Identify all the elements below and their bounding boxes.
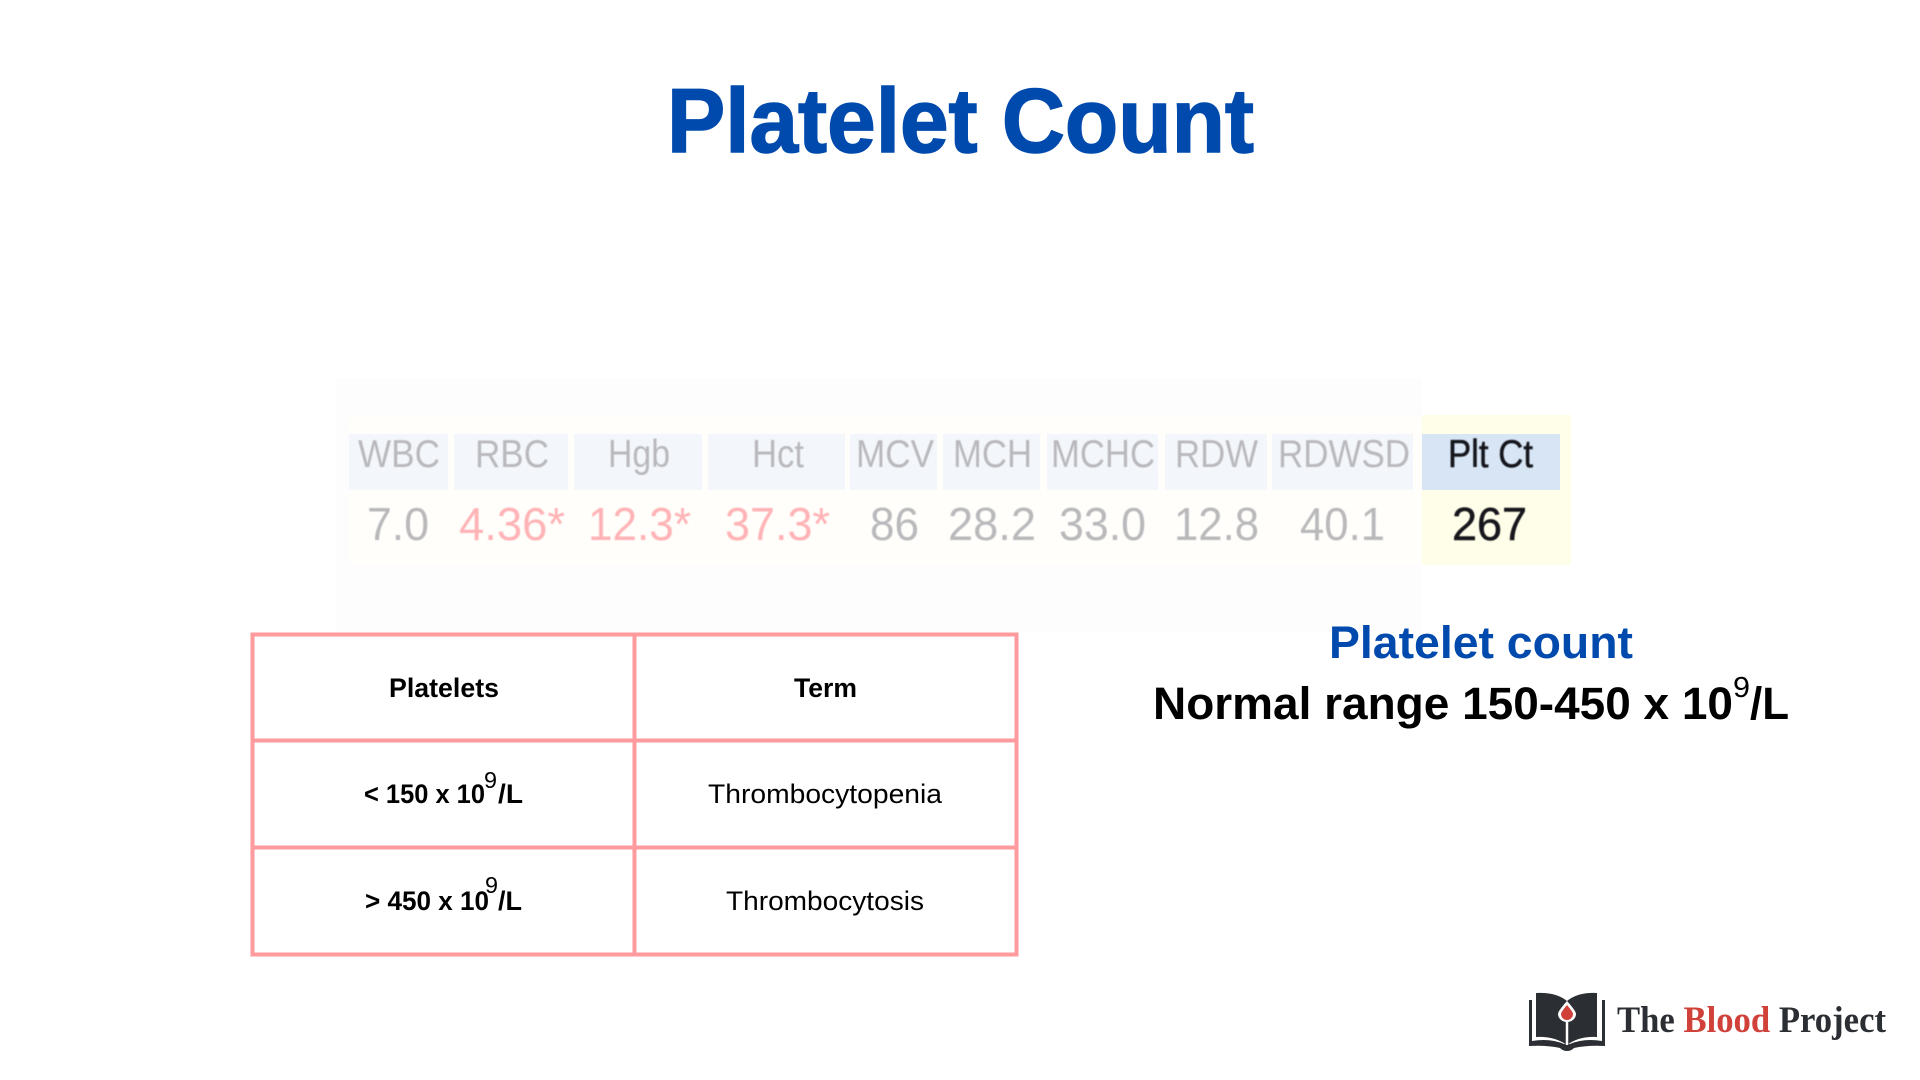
title: Platelet Count <box>667 71 1254 172</box>
row: below 150 <box>364 767 523 809</box>
lab value row: 12.8 <box>1174 498 1259 550</box>
lab header row: RBC <box>475 433 549 476</box>
lab value row: 28.2 <box>948 498 1036 550</box>
lab header row: RDW <box>1175 433 1258 476</box>
term: Thrombocytopenia: Thrombocytopenia <box>708 779 943 809</box>
text block: normal range: Normal range 150-450 x 10 <box>1153 678 1733 729</box>
row: above 450: /L <box>498 886 522 916</box>
lab value row: 267 <box>1452 498 1527 550</box>
lab value row: 7.0 <box>367 498 429 550</box>
row: below 150: < 150 x 10 <box>364 779 485 809</box>
lab header row: WBC <box>358 433 440 476</box>
row: above 450 <box>365 872 522 916</box>
icon: open book with blood drop <box>1529 993 1605 1051</box>
table header: Term: Term <box>794 673 857 703</box>
lab header row: MCHC <box>1051 433 1155 476</box>
lab header row: MCV <box>856 433 934 476</box>
lab header row <box>349 433 1560 490</box>
lab value row: 33.0 <box>1059 498 1146 550</box>
logo wordmark: The Blood Project <box>1617 1000 1887 1041</box>
row: above 450: 9 <box>485 872 498 898</box>
lab header row: RDWSD <box>1278 433 1410 476</box>
heading: platelet count: Platelet count <box>1329 617 1633 668</box>
lab value row: 4.36* <box>459 498 565 550</box>
logo: The Blood Project <box>1529 993 1887 1051</box>
lab header row: Hct <box>752 433 804 476</box>
row: below 150: 9 <box>484 767 497 793</box>
text block: normal range: /L <box>1750 678 1789 729</box>
lab value row: 86 <box>870 498 919 550</box>
panel: CBC lab result strip <box>336 378 1571 632</box>
row: below 150: /L <box>498 779 523 809</box>
lab header row: Plt Ct <box>1448 433 1533 476</box>
lab value row: 37.3* <box>725 498 830 550</box>
table header: Platelets: Platelets <box>389 673 499 703</box>
text block: normal range: 9 <box>1733 672 1750 704</box>
lab value row: 12.3* <box>588 498 691 550</box>
lab value row <box>367 498 1527 550</box>
lab header row: MCH <box>953 433 1032 476</box>
lab value row: 40.1 <box>1300 498 1385 550</box>
term: Thrombocytosis: Thrombocytosis <box>726 886 924 916</box>
lab header row: Hgb <box>608 433 670 476</box>
panel: platelet terminology table <box>252 634 1017 955</box>
row: above 450: > 450 x 10 <box>365 886 489 916</box>
